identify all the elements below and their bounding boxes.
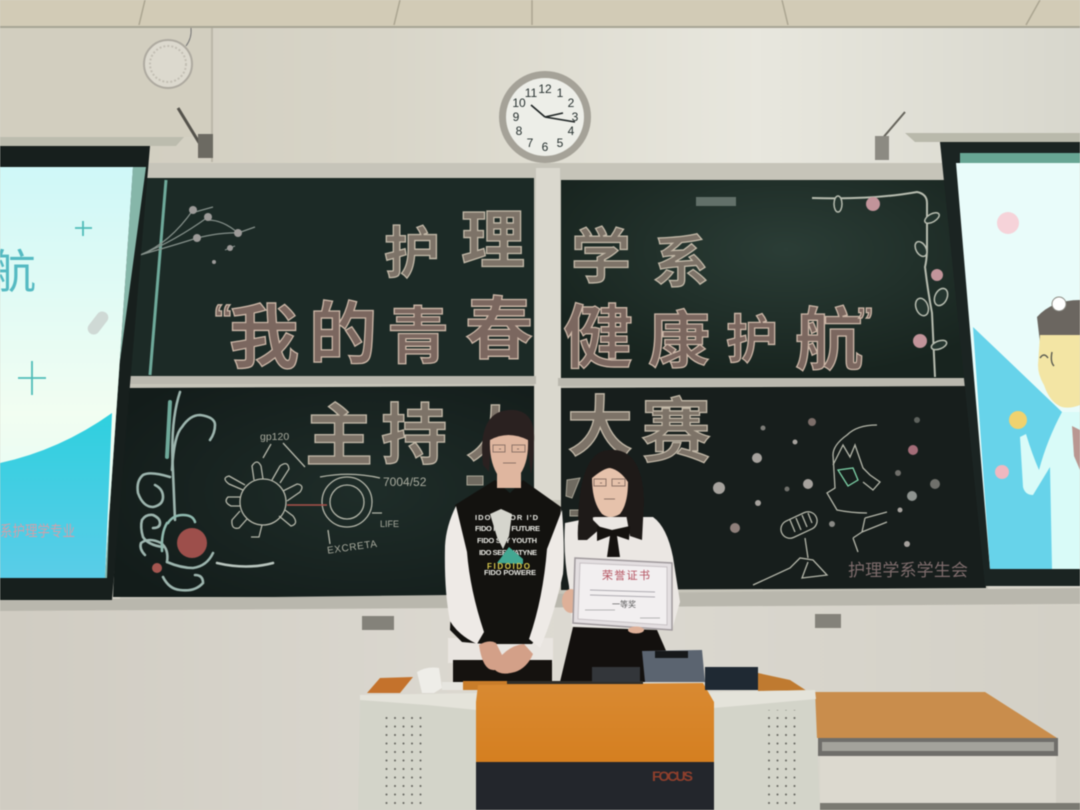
smoke detector: [144, 28, 192, 88]
desktop equipment: [417, 650, 758, 693]
heading: chalk title line 2: 青: [387, 303, 449, 372]
heading: chalk title line 1: 系: [653, 231, 709, 294]
wall clock: 5: [557, 136, 564, 150]
heading: chalk title line 1: 学: [571, 224, 631, 291]
heading: chalk title line 3: [305, 390, 711, 475]
drawing: floral branches upper left: [140, 206, 255, 264]
certificate: 一等奖: [612, 599, 636, 609]
printed slogan: FIDO NEW FUTURE: [475, 524, 540, 533]
drawing: chalk blossoms: [713, 417, 940, 547]
heading: chalk title line 1: 护: [384, 222, 440, 285]
left speaker holes: [385, 713, 423, 810]
text: chalk notes: [260, 431, 427, 557]
drawing: anime girl with microphone: [753, 425, 887, 585]
chalk rails: [122, 376, 968, 386]
heading: chalk title line 2: “: [213, 297, 233, 341]
heading: chalk title line 3: 持: [381, 398, 447, 472]
wall clock: [499, 71, 591, 163]
white shirt hem: [448, 638, 553, 663]
printed slogan: FIDO SAY YOUTH: [477, 536, 537, 545]
floor line: [820, 803, 1080, 810]
hand under certificate: [628, 626, 644, 634]
face: [592, 468, 628, 517]
text: chalk notes: gp120: [260, 431, 289, 443]
wall clock: 7: [527, 136, 534, 150]
drawing: vine upper right: [696, 192, 950, 377]
wall clock: 11: [525, 86, 538, 100]
drawing: chalk virus diagram: [225, 443, 382, 544]
heading: chalk title line 3: 主: [305, 399, 373, 475]
glasses and features: [594, 479, 625, 499]
text: chalk notes: EXCRETA: [326, 539, 378, 557]
panel: lower left blackboard: [113, 386, 534, 597]
right wood trim: [758, 673, 807, 691]
hair: [482, 410, 534, 474]
certificate: [573, 558, 672, 630]
text: chalk notes: LIFE: [380, 519, 399, 529]
person: left woman: [445, 410, 564, 682]
illustration: cartoon doctor: [995, 212, 1080, 569]
printed slogan: IDO SEF WATYNE: [479, 548, 537, 557]
blackboard frame: [120, 163, 988, 603]
heading: chalk title line 1: [384, 205, 709, 294]
left wall mount: [0, 137, 184, 146]
heading: chalk title line 2: 护: [726, 312, 778, 370]
glasses and features: [493, 445, 525, 463]
blouse: [564, 517, 680, 630]
printed slogan: [475, 513, 540, 577]
lower wall: [0, 605, 1080, 810]
chalk fragments behind people: [467, 476, 580, 516]
hair back: [578, 450, 644, 542]
ceiling: [0, 0, 1080, 27]
centre board divider: [534, 168, 561, 500]
wall clock: 4: [568, 124, 575, 138]
neck bow: [597, 526, 630, 557]
orange front panel: [476, 683, 714, 762]
heading: chalk title line 2: 航: [795, 303, 863, 379]
wall clock: 2: [568, 96, 575, 110]
bottom chalk tray: [0, 588, 1080, 630]
certificate: 荣誉证书: [602, 568, 650, 582]
wall clock: 10: [512, 96, 526, 110]
printed slogan: FIDO POWERE: [484, 568, 536, 577]
wall clock: 12: [538, 82, 552, 96]
right speaker holes: [763, 710, 798, 810]
right projection: [956, 153, 1080, 569]
right wall mount: [905, 133, 1080, 142]
right projector screen housing: [940, 142, 1080, 586]
printed slogan: IDO U FOR I'D: [475, 513, 539, 522]
heading: chalk title line 2: 我: [229, 299, 299, 377]
yellow slogan: FIDOIDO: [487, 562, 530, 571]
panel: upper right blackboard: [561, 180, 970, 378]
heading: chalk title line 2: 的: [309, 297, 377, 373]
wall clock: 1: [557, 86, 564, 100]
wall brackets: [178, 108, 905, 160]
heading: chalk title line 2: [213, 292, 874, 379]
hand: [562, 589, 580, 613]
text: chalk notes: 7004/52: [383, 475, 427, 489]
left projector screen housing: [0, 146, 150, 600]
side table: [815, 692, 1058, 806]
teal graphic: [497, 547, 523, 564]
zebra graphic: [490, 509, 512, 549]
podium: [358, 673, 820, 810]
heading: chalk title line 1: 理: [461, 205, 525, 277]
drawing: green chalk line: [150, 180, 166, 375]
text: chalk signature: 护理学系学生会: [848, 561, 968, 580]
face: [490, 435, 528, 480]
right cabinet top: [705, 690, 816, 708]
wall clock: 8: [516, 124, 523, 138]
brand label: FOCUS: [652, 768, 693, 784]
heading: chalk title line 3: 大: [567, 390, 633, 464]
dark trousers: [453, 660, 552, 682]
person: right woman: [560, 450, 680, 682]
panel: lower right blackboard: [561, 386, 986, 590]
hands: [479, 641, 533, 674]
rear surface: [463, 681, 643, 690]
black skirt: [560, 627, 672, 682]
heading: chalk title line 2: 春: [465, 292, 533, 368]
dark lower panel: [476, 762, 714, 810]
left projection: [0, 167, 146, 578]
drawing: lower left floral ornament: [138, 392, 273, 590]
right cabinet: [705, 690, 820, 810]
left wood trim: [367, 677, 413, 693]
left projection: 系护理学专业: [0, 523, 75, 540]
heading: chalk title line 3: 人: [466, 402, 526, 469]
white sleeves: [445, 506, 484, 644]
hair front: [578, 490, 644, 540]
upper wall: [0, 27, 1080, 167]
left cabinet: [358, 693, 478, 810]
heading: chalk title line 2: 健: [563, 299, 633, 377]
left cabinet top: [360, 693, 478, 710]
icon: chalk flower: [152, 528, 207, 573]
wall clock: 9: [513, 110, 520, 124]
wall clock: 6: [542, 140, 549, 154]
heading: chalk title line 3: 赛: [641, 393, 711, 471]
wall clock: 3: [572, 110, 579, 124]
black hooded vest: [450, 480, 561, 644]
panel: upper left blackboard: [124, 178, 534, 376]
heading: chalk title line 2: 康: [648, 307, 710, 376]
heading: chalk title line 2: ”: [856, 300, 874, 341]
